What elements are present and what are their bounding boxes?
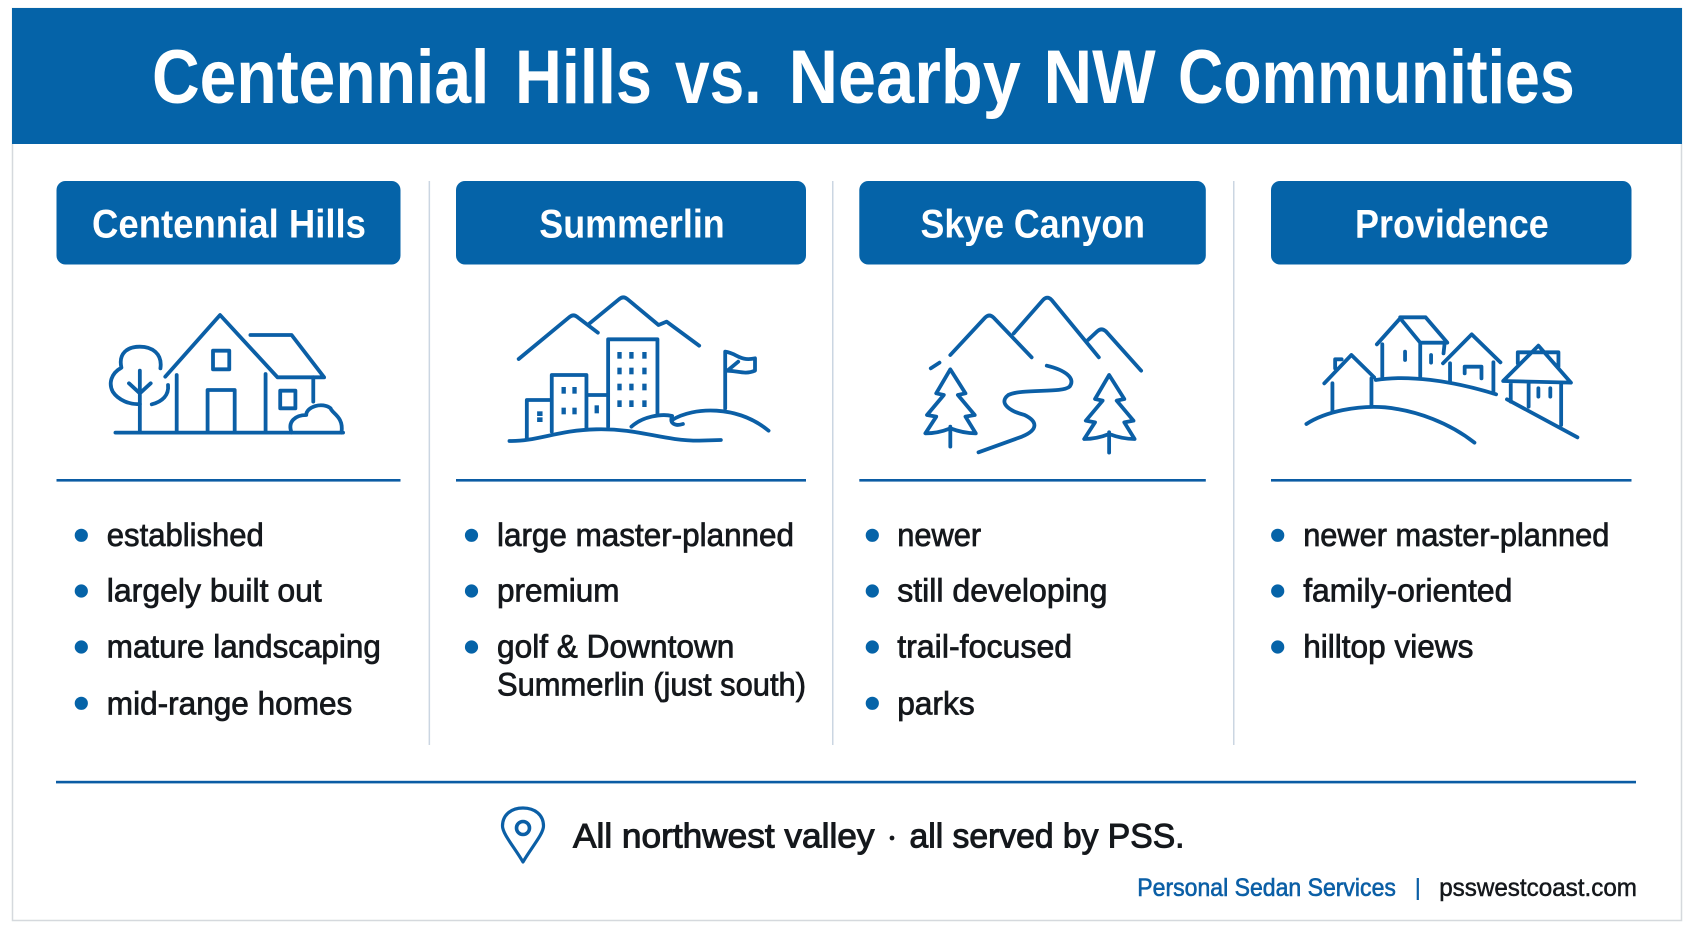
bullet list: Centennial Hills: mature landscaping — [107, 629, 381, 665]
brand credit: Personal Sedan Services — [1137, 874, 1396, 902]
footer text — [573, 818, 1184, 856]
brand credit: psswestcoast.com — [1439, 874, 1637, 902]
bullet list: Skye Canyon: still developing — [897, 573, 1108, 609]
icon: mountains, trail and pines — [925, 298, 1141, 453]
heading: Summerlin — [456, 181, 806, 264]
heading: Providence — [1271, 181, 1632, 264]
icon: houses on hilltop — [1306, 317, 1577, 443]
bullet list: Summerlin: golf & Downtown — [497, 629, 734, 665]
title — [152, 35, 1575, 120]
footer text: all served by PSS. — [910, 818, 1184, 856]
title: Centennial — [152, 35, 489, 120]
icon: mountains, city and golf flag — [509, 297, 769, 441]
footer statement — [502, 808, 1184, 862]
bullet list: Skye Canyon: newer — [897, 517, 981, 553]
title: Hills — [515, 35, 652, 120]
bullet list: Summerlin: large master-planned — [497, 517, 794, 553]
title: NW — [1044, 35, 1156, 120]
bullet list: Summerlin — [465, 517, 806, 703]
bullet list: Centennial Hills: largely built out — [107, 573, 322, 609]
heading: Centennial Hills — [56, 181, 400, 264]
bullet list: Skye Canyon — [866, 517, 1108, 721]
heading: Providence: Providence — [1355, 203, 1549, 247]
brand credit — [1137, 874, 1637, 902]
title: Nearby — [789, 35, 1021, 120]
title: vs. — [675, 35, 762, 120]
title: Communities — [1178, 35, 1575, 120]
panel: Skye Canyon — [859, 181, 1206, 721]
bullet list: Skye Canyon: trail-focused — [897, 629, 1072, 665]
title banner — [12, 8, 1682, 144]
heading: Skye Canyon — [859, 181, 1206, 264]
bullet list: Summerlin: Summerlin (just south) — [497, 667, 806, 703]
panel: Providence — [1271, 181, 1632, 665]
heading: Skye Canyon: Skye Canyon — [920, 203, 1145, 247]
icon: house with tree — [111, 315, 343, 433]
panel: Centennial Hills — [56, 181, 400, 721]
bullet list: Providence: family-oriented — [1303, 573, 1512, 609]
heading: Summerlin: Summerlin — [539, 203, 725, 247]
icon: map pin — [502, 808, 544, 862]
bullet list: Skye Canyon: parks — [897, 685, 975, 721]
bullet list: Centennial Hills: established — [107, 517, 264, 553]
footer text: All northwest valley — [573, 818, 874, 856]
bullet list: Centennial Hills — [75, 517, 381, 721]
bullet list: Summerlin: premium — [497, 573, 620, 609]
bullet list: Providence: newer master-planned — [1303, 517, 1609, 553]
panel: Summerlin — [456, 181, 806, 703]
heading: Centennial Hills: Centennial Hills — [92, 203, 366, 247]
bullet list: Centennial Hills: mid-range homes — [107, 685, 352, 721]
bullet list: Providence: hilltop views — [1303, 629, 1473, 665]
bullet list: Providence — [1271, 517, 1609, 665]
